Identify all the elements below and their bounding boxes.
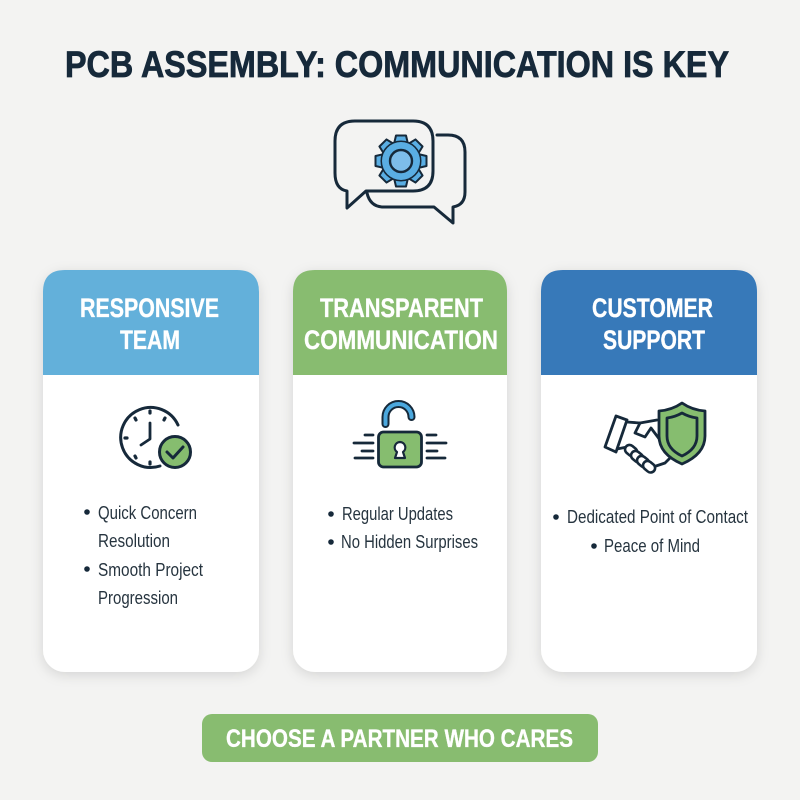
- bullet list: customer support: Dedicated Point of Contact: [567, 507, 748, 527]
- heading: customer support: SUPPORT: [603, 325, 705, 355]
- bullet list: responsive team: [84, 503, 203, 608]
- call to action banner: CHOOSE A PARTNER WHO CARES: [226, 725, 573, 753]
- panel: transparent communication: [293, 270, 507, 672]
- heading: transparent communication: TRANSPARENT: [320, 293, 483, 323]
- bullet list: transparent communication: Regular Updates: [342, 504, 453, 524]
- bullet list: responsive team: Smooth Project: [98, 560, 203, 580]
- bullet list: transparent communication: [328, 504, 478, 552]
- bullet list: responsive team: Quick Concern: [98, 503, 197, 523]
- heading: responsive team: TEAM: [120, 325, 180, 355]
- heading: transparent communication: [304, 293, 498, 355]
- heading: customer support: CUSTOMER: [592, 293, 713, 323]
- bullet list: customer support: [553, 507, 748, 556]
- panel: customer support: [541, 270, 757, 672]
- icon: clock with check: [121, 407, 190, 468]
- icon: handshake with shield: [605, 403, 705, 474]
- icon: chat bubbles with gear: [335, 121, 465, 223]
- header: customer support: [541, 270, 757, 375]
- heading: responsive team: RESPONSIVE: [80, 293, 219, 323]
- heading: responsive team: [80, 293, 219, 355]
- bullet list: responsive team: Progression: [98, 588, 178, 608]
- bullet list: transparent communication: No Hidden Surprises: [341, 532, 478, 552]
- icon: open padlock: [354, 404, 446, 467]
- header: transparent communication: [293, 270, 507, 375]
- call to action banner: [202, 714, 598, 762]
- panel: responsive team: [43, 270, 259, 672]
- bullet list: customer support: Peace of Mind: [604, 536, 700, 556]
- heading: transparent communication: COMMUNICATION: [304, 325, 498, 355]
- bullet list: responsive team: Resolution: [98, 531, 170, 551]
- header: responsive team: [43, 270, 259, 375]
- heading: customer support: [592, 293, 713, 355]
